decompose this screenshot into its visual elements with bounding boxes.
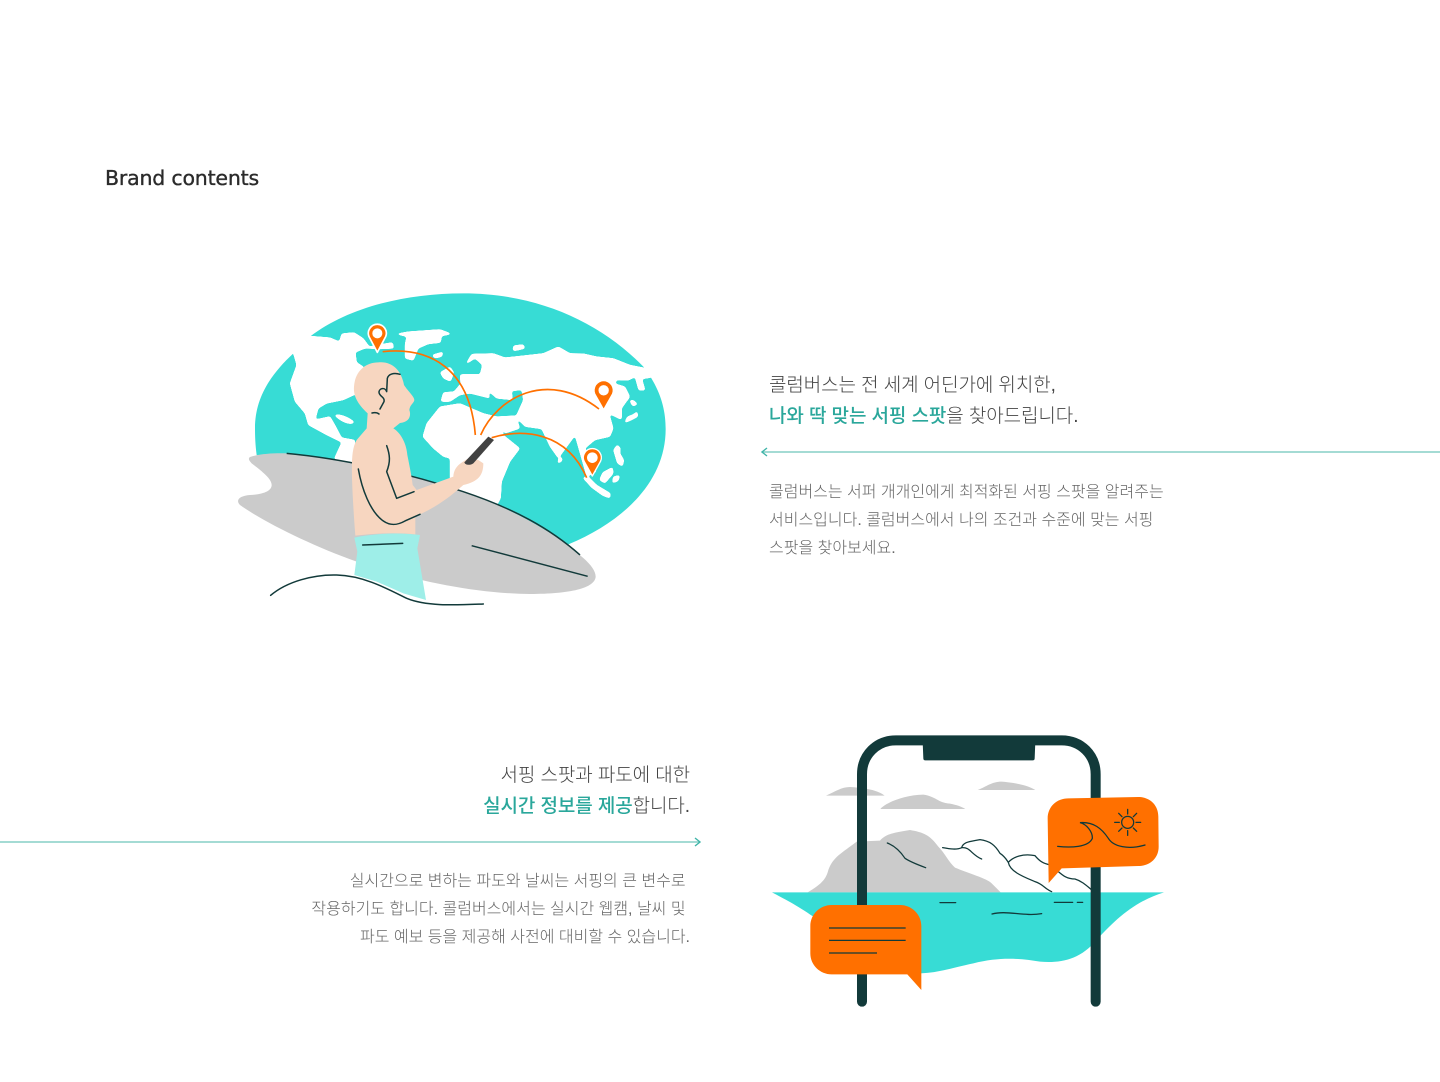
text block: find surf spots description: 스팟을 찾아보세요. xyxy=(769,540,896,557)
land: UK xyxy=(440,367,454,382)
speech bubble: text lines xyxy=(810,905,921,990)
arrow: top section, pointing left xyxy=(762,448,1440,456)
land masses xyxy=(280,329,663,512)
text block: realtime information description: 작용하기도 합니다. 콜럼버스에서는 실시간 웹캠, 날씨 및 xyxy=(311,901,686,918)
land: Africa and Arabia xyxy=(423,403,520,512)
sea ripples xyxy=(940,902,1083,914)
phone notch xyxy=(923,742,1035,760)
land: Greenland xyxy=(395,329,452,361)
text block: realtime information description xyxy=(311,872,690,946)
heading: find surf spots: 콜럼버스는 전 세계 어딘가에 위치한, xyxy=(769,375,1056,396)
mountain xyxy=(808,830,1001,892)
pin 1 xyxy=(368,324,386,352)
phone in hand xyxy=(464,437,494,465)
text block: realtime information description: 실시간으로 변하는 파도와 날씨는 서핑의 큰 변수로 xyxy=(350,873,686,890)
heading: realtime information xyxy=(483,765,690,817)
land: islands xyxy=(624,411,638,423)
heading: find surf spots xyxy=(769,375,1078,427)
board top outline xyxy=(287,453,580,555)
body xyxy=(352,362,483,536)
text block: find surf spots description: 콜럼버스는 서퍼 개개인에게 최적화된 서핑 스팟을 알려주는 xyxy=(769,484,1164,501)
route arcs xyxy=(383,351,599,478)
land: North America xyxy=(280,332,394,462)
phone frame xyxy=(862,740,1096,1002)
text block: find surf spots description xyxy=(769,484,1164,557)
title: Brand contents: Brand contents xyxy=(105,166,259,190)
clouds xyxy=(826,782,1035,809)
cliff lines xyxy=(887,840,1091,892)
arrow: bottom section, pointing right xyxy=(0,838,700,846)
land: Caribbean xyxy=(334,415,355,424)
board xyxy=(238,453,596,594)
text block: find surf spots description: 서비스입니다. 콜럼버스에서 나의 조건과 수준에 맞는 서핑 xyxy=(769,512,1153,529)
speech bubble: wave and sun xyxy=(1048,797,1159,883)
heading: realtime information: 실시간 정보를 제공합니다. xyxy=(483,796,690,817)
heading: realtime information: 서핑 스팟과 파도에 대한 xyxy=(501,765,690,786)
body lines xyxy=(358,374,420,545)
land: Eurasia xyxy=(441,347,663,477)
board stringer xyxy=(472,546,588,576)
wave line xyxy=(271,575,483,605)
heading: find surf spots: 나와 딱 맞는 서핑 스팟을 찾아드립니다. xyxy=(769,406,1078,427)
shorts xyxy=(354,534,426,600)
surfer xyxy=(352,362,494,600)
illustration: phone with surf spot xyxy=(772,740,1164,1002)
pin 3 xyxy=(583,449,601,476)
globe xyxy=(238,293,666,605)
text block: realtime information description: 파도 예보 등을 제공해 사전에 대비할 수 있습니다. xyxy=(360,929,690,946)
sea xyxy=(772,892,1164,973)
pin 2 xyxy=(595,381,613,408)
